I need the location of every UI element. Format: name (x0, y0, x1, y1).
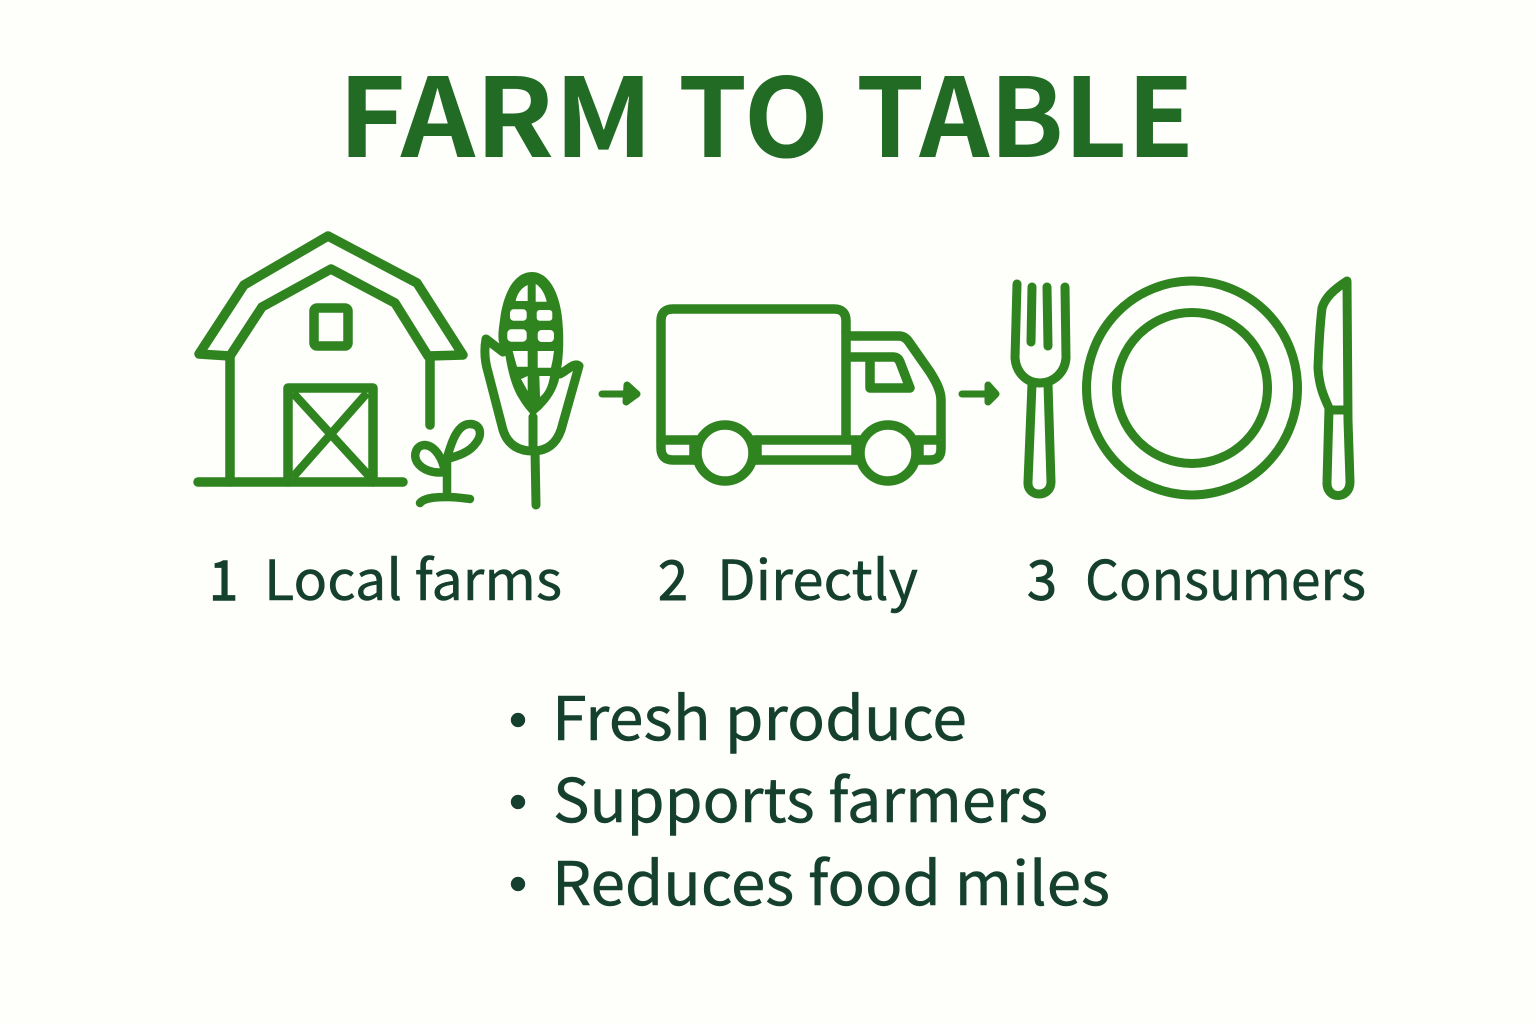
title: TO (678, 32, 829, 189)
title: FARM (338, 32, 653, 189)
label: step 3: 3 (1027, 536, 1057, 616)
icon: fork (1015, 284, 1066, 494)
bullet: supports farmers: Supports farmers (553, 753, 1048, 840)
corn kernels (507, 284, 554, 397)
label: step 1: Local farms (264, 536, 562, 616)
bullet list (511, 671, 1110, 923)
label: step 2: 2 (658, 536, 688, 616)
icon: seedling (415, 424, 480, 503)
icon: truck (661, 309, 941, 481)
arrow: farm to truck (602, 385, 637, 402)
arrow: truck to table (962, 385, 996, 402)
corn cob (498, 272, 563, 417)
icon: plate (1086, 281, 1298, 495)
label: step 1: 1 (209, 536, 238, 616)
label: step 2: Directly (717, 536, 918, 616)
icon: barn (198, 236, 463, 482)
label: step 3: Consumers (1085, 536, 1366, 616)
icon: knife (1318, 281, 1350, 496)
icon: corn (485, 272, 579, 505)
bullet: fresh produce: Fresh produce (552, 671, 967, 758)
title: TABLE (856, 32, 1194, 189)
title (338, 32, 1194, 189)
corn husk and stem (485, 339, 579, 505)
bullet: reduces food miles: Reduces food miles (552, 836, 1110, 923)
